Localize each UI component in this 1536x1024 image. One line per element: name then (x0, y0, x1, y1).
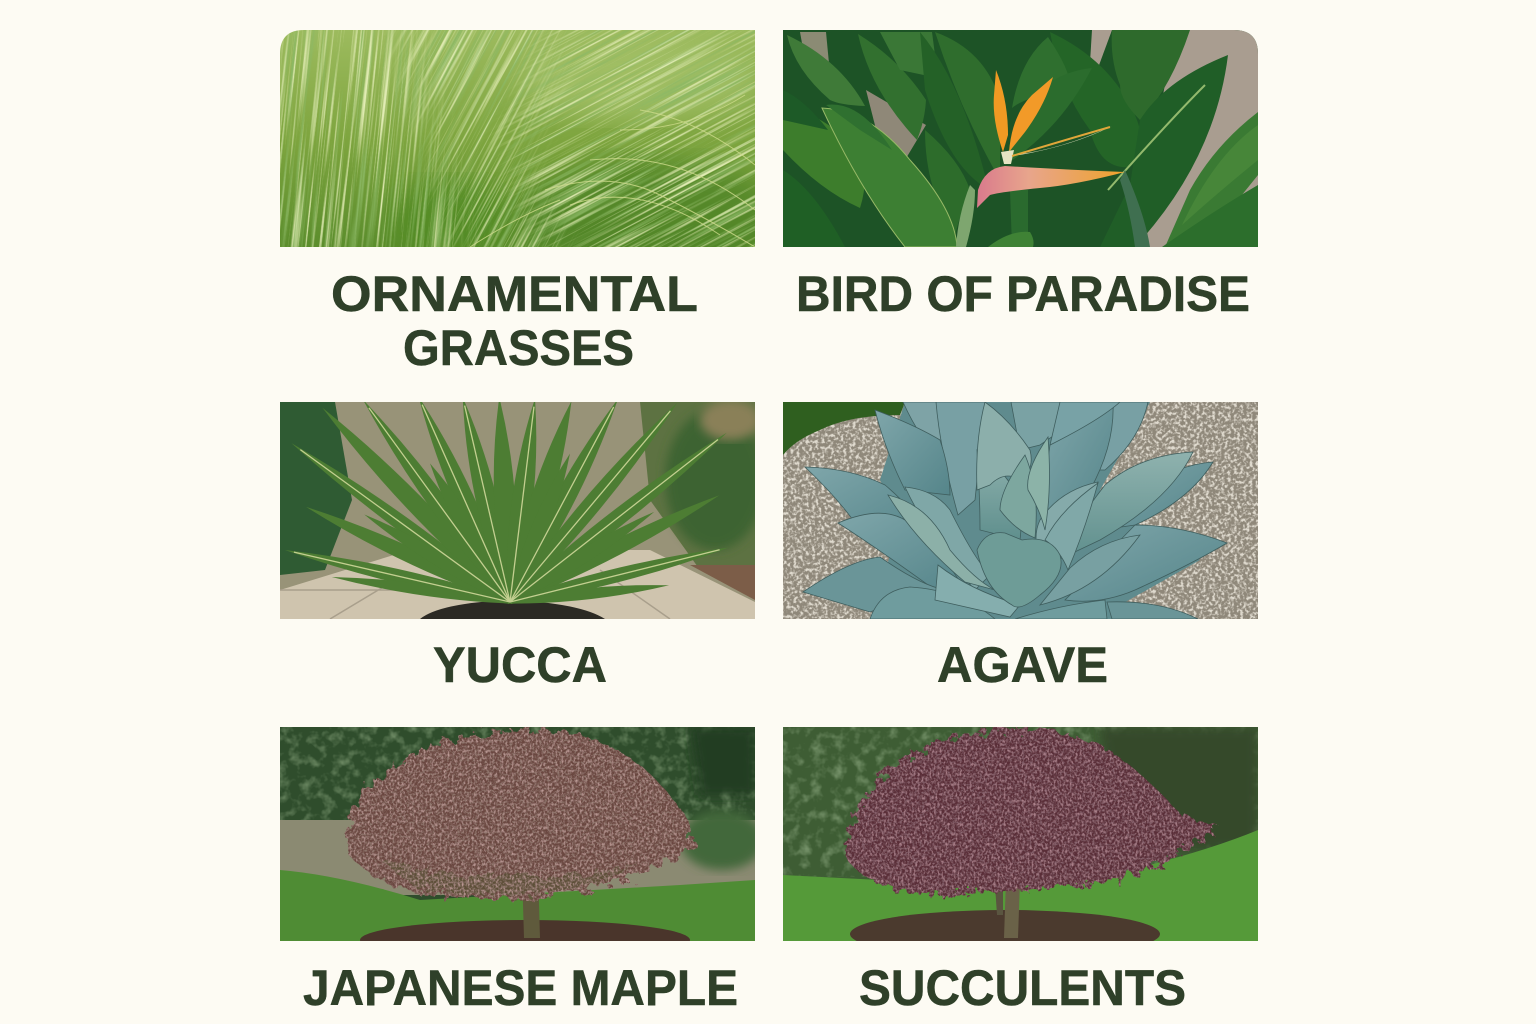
heading: bird of paradise: BIRD OF PARADISE (796, 266, 1250, 322)
paving (280, 550, 755, 619)
heading: agave: AGAVE (937, 637, 1108, 693)
trunk (1004, 888, 1020, 938)
panel: bird of paradise photo (783, 30, 1258, 247)
panel: japanese maple photo (280, 727, 764, 960)
heading: ornamental grasses (331, 266, 698, 376)
stem (1120, 170, 1150, 247)
pot (420, 602, 605, 619)
heading: yucca: YUCCA (433, 637, 607, 693)
maple canopy (345, 730, 692, 900)
heading: succulents: SUCCULENTS (859, 960, 1186, 1016)
background foliage (280, 402, 352, 575)
panel: agave photo (783, 402, 1258, 619)
green shrub (783, 402, 905, 455)
inner leaves (977, 450, 1021, 540)
trunk (523, 894, 540, 938)
maple canopy (845, 730, 1218, 895)
yucca fronds (283, 392, 732, 609)
heading: ornamental grasses: GRASSES (403, 320, 634, 376)
panel: succulents photo (783, 727, 1258, 958)
heading: ornamental grasses: ORNAMENTAL (331, 266, 698, 322)
side leaves (804, 466, 900, 518)
plant body (870, 402, 1200, 619)
central heart leaf (977, 533, 1061, 607)
big foreground leaf (822, 108, 957, 247)
mulch (360, 920, 690, 941)
lawn (280, 870, 755, 941)
panel: yucca photo (280, 392, 765, 619)
heading: japanese maple: JAPANESE MAPLE (303, 960, 738, 1016)
flower (977, 70, 1125, 208)
bottom leaves (870, 587, 995, 619)
back leaves (902, 402, 940, 440)
lawn (783, 830, 1258, 941)
panel: ornamental grasses photo (280, 30, 755, 247)
mulch (850, 910, 1160, 941)
taupe wall background (1135, 30, 1258, 247)
